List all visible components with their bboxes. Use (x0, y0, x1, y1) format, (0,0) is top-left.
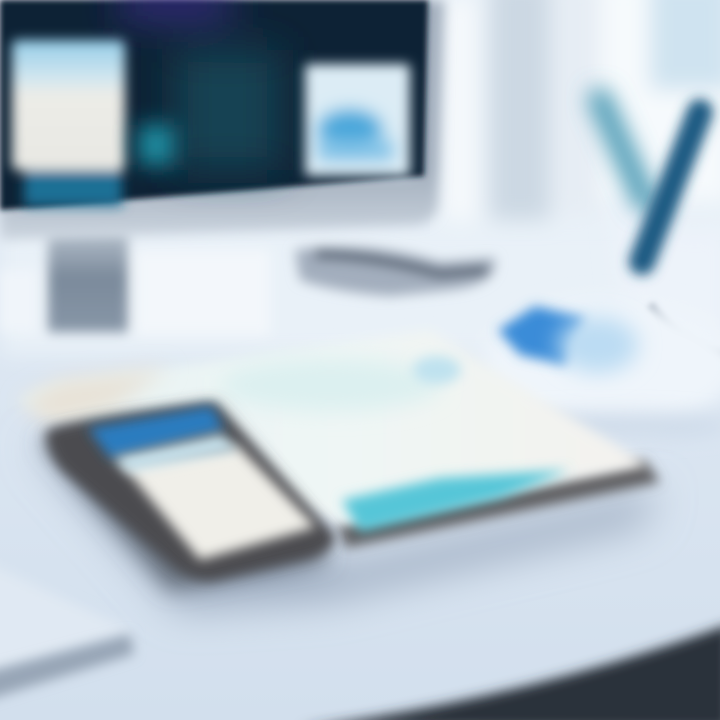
monitor bezel (0, 0, 444, 240)
tablet light blue blob (413, 356, 461, 384)
tablet (18, 330, 660, 610)
monitor stand (0, 232, 270, 335)
pen holder (600, 100, 720, 355)
wall columns behind the monitor (445, 0, 720, 220)
phone body (46, 402, 335, 580)
tablet warm corner (20, 368, 170, 425)
keyboard or cable on the desk (295, 247, 495, 296)
blue accent (498, 306, 585, 365)
phone blue header (88, 406, 224, 458)
phone soft shadow (40, 410, 330, 590)
tablet edge (338, 460, 660, 548)
tablet shadow (30, 440, 660, 610)
tablet aqua haze (220, 359, 440, 411)
left screen card (12, 40, 125, 206)
phone (40, 402, 335, 590)
monitor screen (0, 0, 428, 210)
holder cup (610, 190, 720, 355)
dark desk edge at bottom right (300, 624, 720, 720)
tablet teal band (342, 470, 570, 532)
teal screen square (138, 125, 174, 165)
tablet surface (18, 330, 648, 525)
right screen card (305, 64, 410, 176)
holder base ring (650, 305, 720, 355)
box at bottom left (0, 560, 135, 702)
dark blue pen (642, 112, 700, 262)
screen glows (120, 0, 280, 170)
phone screen (120, 446, 316, 560)
teal pen (600, 100, 645, 200)
monitor (0, 0, 444, 335)
round white plate with blue accent (480, 300, 720, 435)
